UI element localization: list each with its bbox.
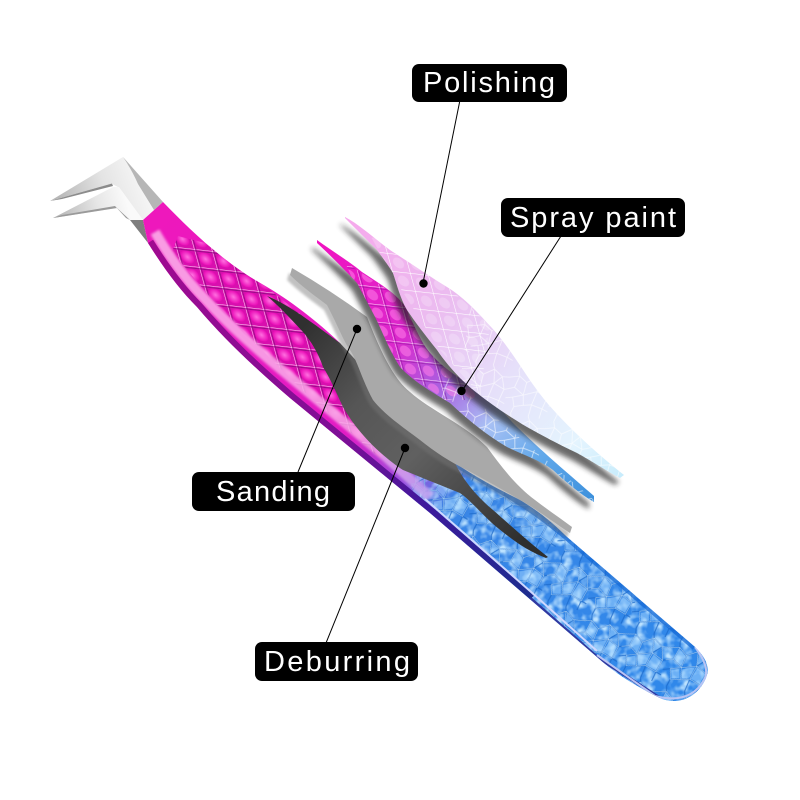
callout: Polishing [412, 64, 567, 288]
callout: Sanding [192, 325, 361, 511]
callout: Spray paint: Spray paint [510, 202, 676, 234]
tweezer body with gradient [143, 202, 708, 701]
panel: gray sanding layer [287, 268, 572, 538]
callout: Deburring: Deburring [264, 646, 410, 678]
textured blue crackle handle [408, 464, 708, 701]
diamond lattice pattern [172, 236, 383, 458]
callout: Polishing: Polishing [423, 67, 555, 99]
panel: dark deburring layer [267, 296, 548, 558]
lower edge highlight and purple strip [148, 232, 706, 698]
panel: polishing layer [340, 217, 630, 485]
callout: Spray paint [457, 198, 685, 395]
callout: Sanding: Sanding [216, 476, 330, 508]
main tweezer [50, 157, 730, 720]
silver angled tip [50, 157, 163, 243]
callout: Deburring [255, 444, 418, 681]
panel: spray paint layer [312, 240, 600, 510]
